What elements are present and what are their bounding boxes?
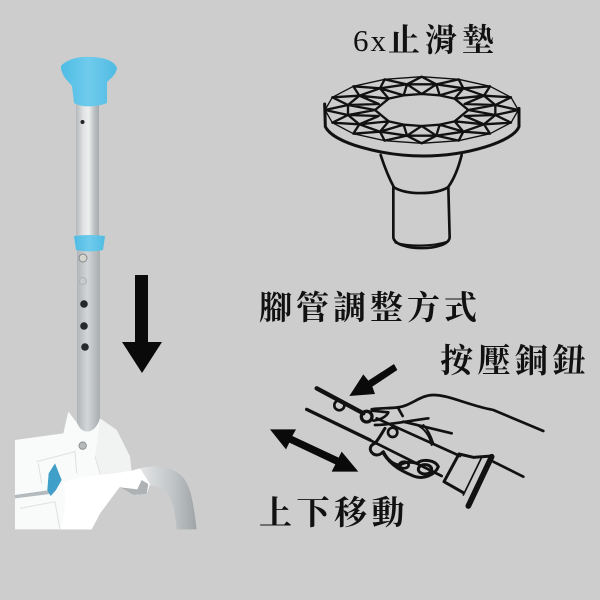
icon: blue rubber foot cap — [61, 57, 117, 106]
line drawing: hand pressing the button on the leg — [270, 364, 543, 506]
heading: leg adjustment: 腳管調整方式 — [259, 291, 481, 327]
cylinder — [393, 187, 450, 248]
triangle mesh — [325, 77, 518, 143]
tube — [317, 388, 363, 413]
funnel neck — [381, 155, 462, 193]
adjustment holes — [79, 254, 87, 262]
disc rim — [325, 104, 519, 156]
label: move up and down: 上下移動 — [259, 496, 409, 532]
icon: blue clip — [47, 463, 62, 496]
leg end and pad — [444, 454, 492, 493]
hand — [372, 395, 543, 431]
photo: aluminium leg tube — [76, 103, 100, 435]
arrow: move up and down — [270, 429, 358, 472]
icon: blue tube collar — [74, 235, 105, 252]
label: press button: 按壓銅鈕 — [440, 344, 590, 380]
arrow: press button — [349, 364, 397, 396]
photo: white seat base with handrail — [15, 412, 197, 529]
arrow: downward — [122, 275, 162, 373]
heading: anti-slip pad: 6x止滑墊 — [353, 22, 499, 58]
line drawing: anti-slip pad — [325, 77, 519, 248]
